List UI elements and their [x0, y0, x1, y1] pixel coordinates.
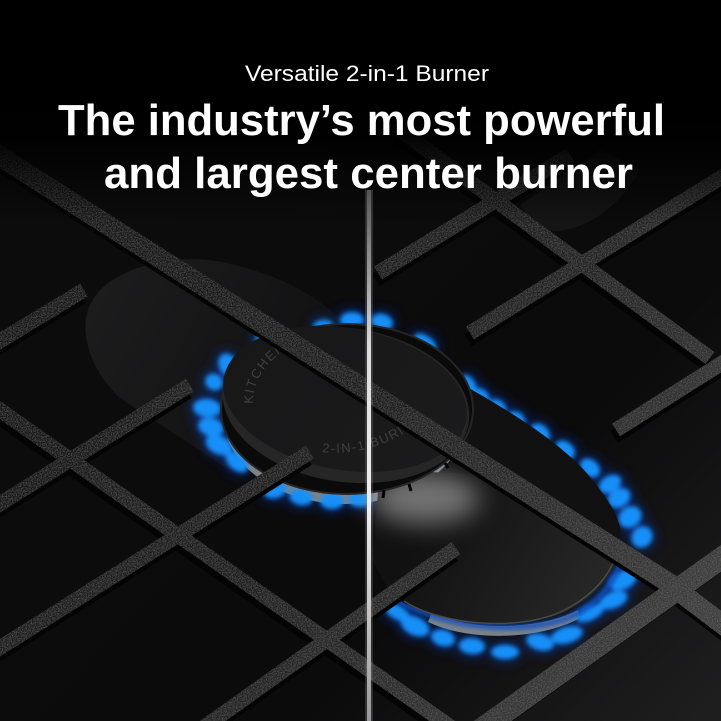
grey ring under center burner flames [223, 326, 467, 504]
left burner pan [85, 259, 350, 470]
burner dish [212, 311, 480, 499]
upper right burner shadow [520, 150, 640, 231]
subtitle: Versatile 2-in-1 Burner [245, 61, 489, 86]
blue edge [392, 562, 620, 627]
blue flames [192, 311, 657, 659]
blue flame halo [192, 311, 657, 659]
embossed cap text [244, 348, 420, 453]
burner notches [383, 463, 448, 498]
metal glow beside center burner [370, 472, 480, 524]
burner ring [221, 324, 473, 494]
vertical comparison divider [365, 190, 373, 721]
title: and largest center burner [104, 149, 633, 198]
title: The industry’s most powerful [58, 96, 665, 145]
embossed cap text: KITCHEN [244, 348, 280, 403]
oval burner cap [372, 372, 621, 627]
grey ring under oval burner flames [428, 610, 580, 636]
embossed cap text: 2-IN-1 BURNER [322, 412, 420, 453]
lower cap lens [372, 470, 617, 623]
upper cap section [420, 372, 621, 535]
top dark gradient overlay [0, 0, 721, 225]
burner cap [212, 308, 478, 490]
title [58, 96, 665, 198]
lower cap rim [404, 558, 615, 624]
center burner [220, 323, 474, 498]
